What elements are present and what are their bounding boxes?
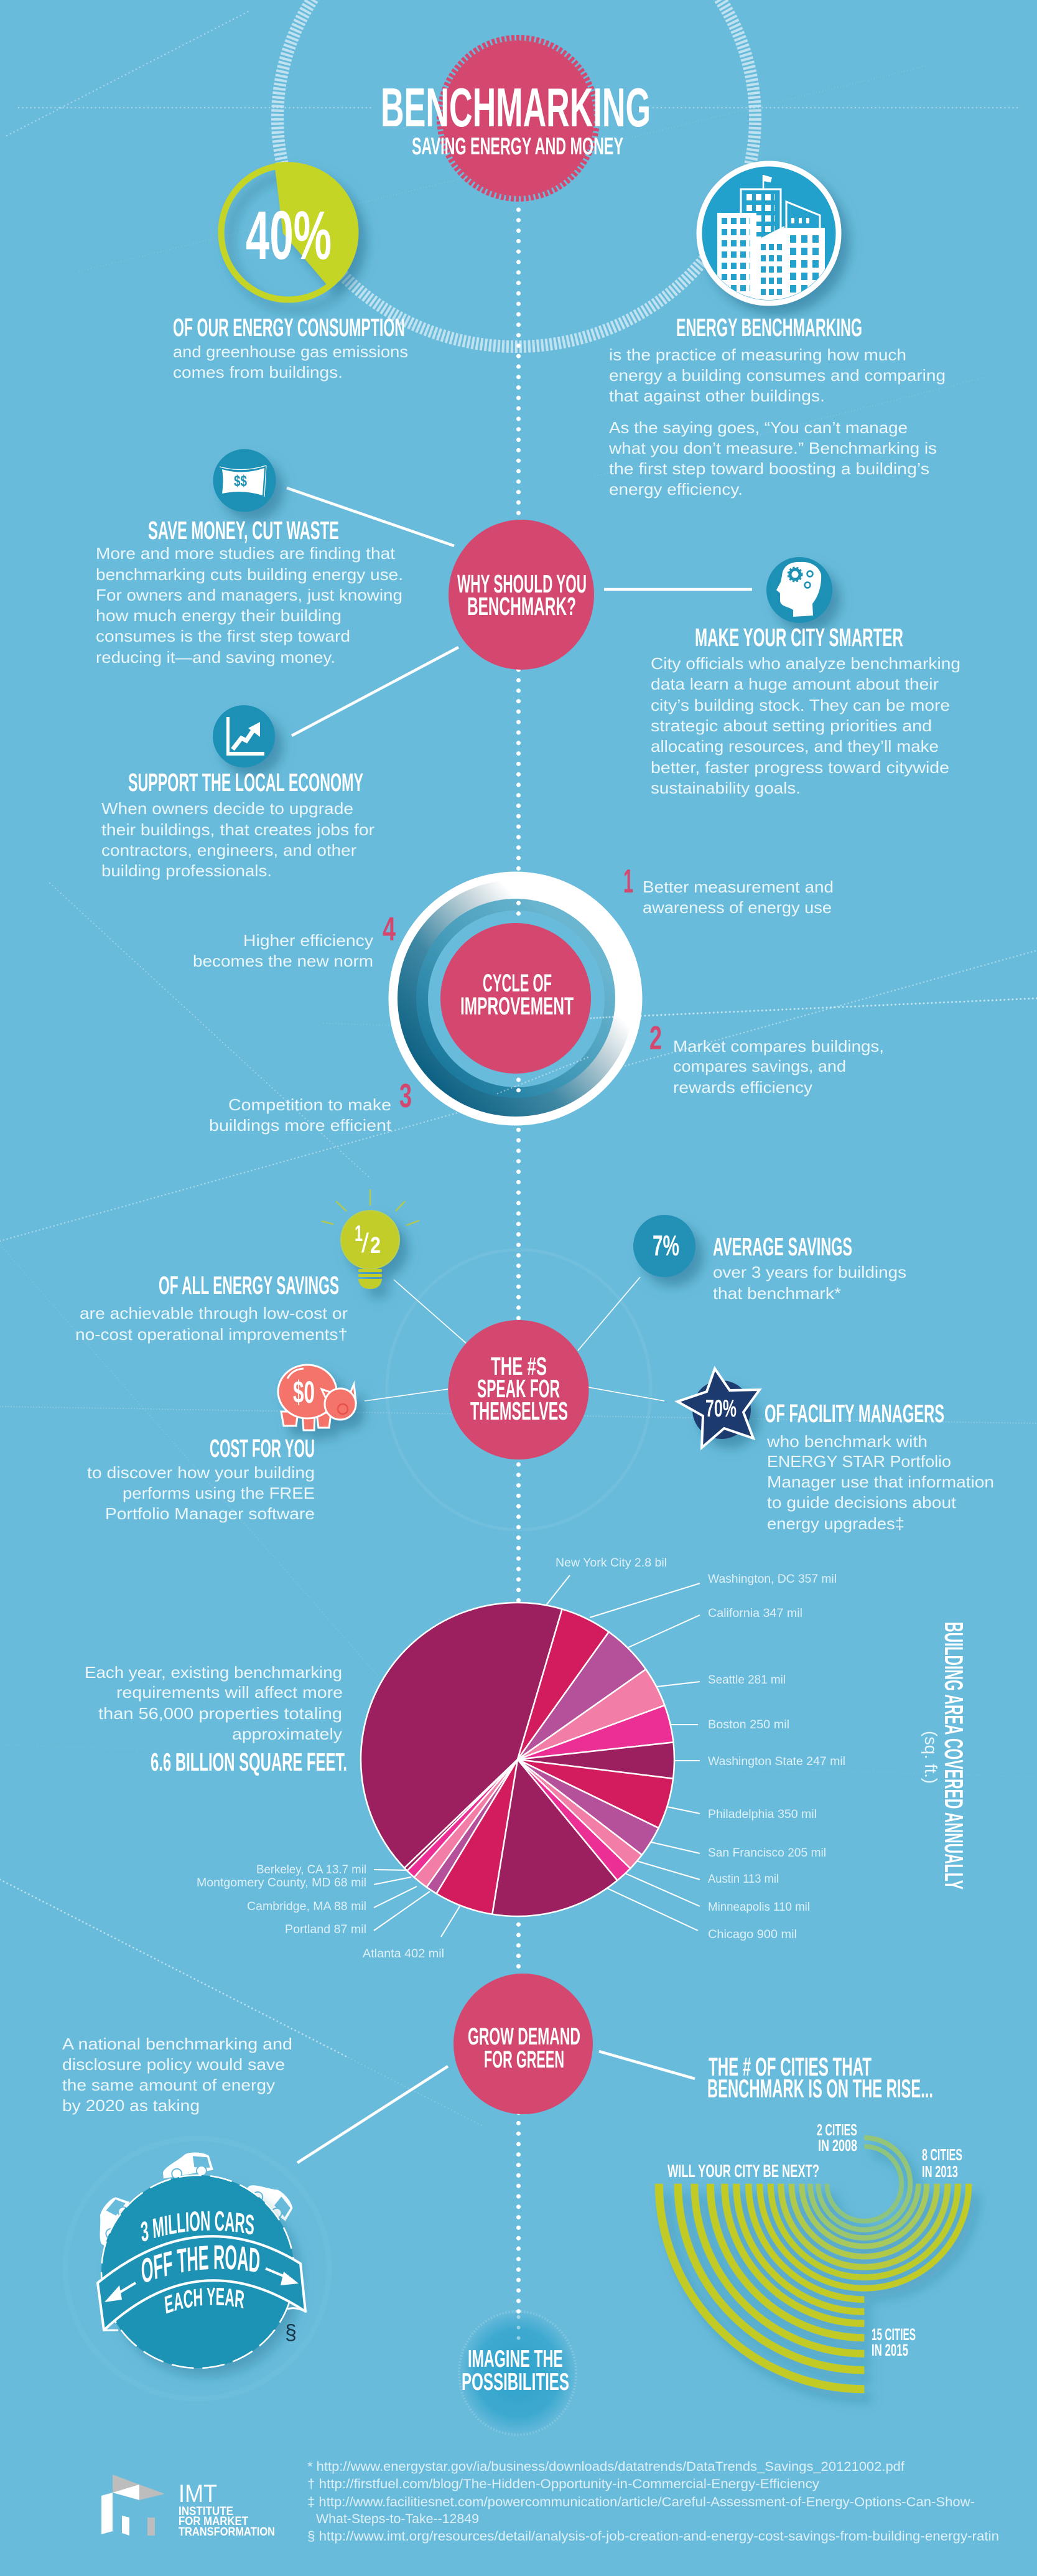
average savings body: over 3 years for buildings	[713, 1263, 906, 1281]
facility managers body: Manager use that information	[767, 1473, 994, 1491]
icon: 40 percent pie ring	[221, 162, 358, 300]
city body text	[651, 654, 960, 797]
city body text: sustainability goals.	[651, 779, 801, 797]
step 3: Competition to make	[228, 1095, 391, 1114]
body text: that against other buildings.	[609, 386, 825, 405]
numbers connector lines	[365, 1277, 664, 1401]
body text: As the saying goes, “You can’t manage	[609, 418, 908, 437]
step 3	[209, 1077, 412, 1135]
panel: grow demand for green	[62, 1974, 982, 2405]
facility managers body	[766, 1432, 994, 1533]
arc labels: 15 CITIES	[872, 2325, 916, 2344]
cost for you body: Portfolio Manager software	[105, 1504, 315, 1523]
badge text: 3 million cars: 3 MILLION CARS	[141, 2211, 254, 2242]
pie intro text: requirements will affect more	[116, 1683, 343, 1702]
footnotes: § http://www.imt.org/resources/detail/analysis-of-job-creation-and-energy-cost-savings-from-building-energy-ratin	[307, 2529, 999, 2544]
icon: right car	[244, 2173, 298, 2225]
support body text: When owners decide to upgrade	[101, 799, 353, 818]
energy savings body	[75, 1304, 348, 1344]
panel: energy benchmarking	[608, 164, 946, 499]
city body text: better, faster progress toward citywide	[651, 758, 949, 777]
icon: light bulb one half: 2	[370, 1232, 381, 1258]
vertical axis title: BUILDING AREA COVERED ANNUALLY	[939, 1622, 969, 1890]
ribbon arrows	[105, 2269, 299, 2302]
callout: 6.6 billion square feet: 6.6 BILLION SQUARE FEET.	[151, 1748, 347, 1776]
city body text: City officials who analyze benchmarking	[651, 654, 960, 673]
pie labels: Montgomery County, MD 68 mil	[197, 1876, 366, 1890]
icon: 7 percent badge	[633, 1215, 695, 1277]
panel: why should you benchmark	[96, 449, 960, 880]
pie labels: Washington State 247 mil	[708, 1755, 845, 1768]
average savings body: that benchmark*	[713, 1284, 841, 1303]
why heading line 2: BENCHMARK?	[467, 592, 576, 621]
city body text: city’s building stock. They can be more	[651, 696, 950, 714]
numbers circle	[448, 1320, 588, 1459]
badge text: off the road: OFF THE ROAD	[142, 2246, 260, 2282]
imagine the possibilities circle	[458, 2310, 577, 2436]
arc labels	[667, 2120, 962, 2359]
hatched large ring	[277, 0, 755, 347]
heading: energy benchmarking: ENERGY BENCHMARKING	[676, 313, 862, 342]
support body text: contractors, engineers, and other	[101, 841, 356, 859]
pie labels: Washington, DC 357 mil	[708, 1573, 837, 1586]
save money body text: how much energy their building	[96, 606, 342, 625]
step 1: awareness of energy use	[643, 898, 832, 917]
why heading line 1: WHY SHOULD YOU	[457, 569, 587, 598]
grow heading line 1: GROW DEMAND	[468, 2023, 580, 2050]
pie intro text: approximately	[232, 1725, 342, 1743]
average savings body	[713, 1263, 906, 1303]
pie labels: Seattle 281 mil	[708, 1674, 786, 1687]
pie labels: Atlanta 402 mil	[363, 1947, 444, 1960]
logo wordmark: IMT	[179, 2480, 217, 2508]
badge: 3 million cars off the road	[96, 2152, 307, 2381]
arc labels: IN 2013	[922, 2162, 958, 2181]
icon: light bulb one half: 1	[355, 1220, 363, 1246]
step 1: Better measurement and	[643, 878, 834, 896]
step 2: Market compares buildings,	[673, 1037, 884, 1056]
pie labels	[197, 1557, 845, 1960]
facility managers body: energy upgrades‡	[767, 1514, 904, 1533]
heading: number of cities on the rise	[707, 2052, 933, 2103]
numbers heading line 1: THE #S	[491, 1352, 547, 1380]
arc labels: 2 CITIES	[817, 2120, 857, 2139]
icon: growth chart	[213, 705, 275, 767]
icon: piggy bank: $0	[293, 1375, 315, 1410]
pie chart	[361, 1603, 674, 1916]
save money body text: benchmarking cuts building energy use.	[96, 565, 403, 584]
pie intro text: than 56,000 properties totaling	[98, 1704, 342, 1723]
national policy text: disclosure policy would save	[62, 2055, 285, 2074]
title circle	[439, 37, 597, 199]
pie intro text: Each year, existing benchmarking	[85, 1663, 342, 1682]
support body text	[101, 799, 374, 880]
step 1	[623, 863, 834, 917]
icon: top car	[162, 2151, 214, 2180]
icon: buildings	[699, 164, 839, 306]
body text: energy a building consumes and comparing	[609, 366, 946, 385]
national policy text	[62, 2035, 292, 2115]
icon: light bulb one half	[322, 1189, 419, 1289]
step 4: becomes the new norm	[193, 952, 373, 970]
step 3: buildings more efficient	[209, 1116, 392, 1135]
icon: light bulb one half: /	[361, 1228, 370, 1258]
grow heading line 2: FOR GREEN	[484, 2046, 564, 2073]
save money body text: For owners and managers, just knowing	[96, 586, 402, 604]
heading: save money: SAVE MONEY, CUT WASTE	[148, 516, 339, 545]
arc labels: IN 2008	[818, 2136, 857, 2155]
badge text: 3 million cars	[141, 2211, 254, 2242]
cycle center circle	[440, 923, 591, 1074]
logo wordmark	[179, 2480, 275, 2539]
panel: cycle of improvement	[193, 863, 884, 1135]
why circle	[449, 520, 594, 670]
body text: is the practice of measuring how much	[609, 345, 906, 364]
save money body text: consumes is the first step toward	[96, 627, 350, 645]
section footnote mark: §	[285, 2321, 297, 2344]
ribbon flaps	[104, 2308, 305, 2330]
save money body text	[96, 544, 403, 667]
numbers heading line 3: THEMSELVES	[470, 1397, 568, 1425]
step 1: 1	[623, 863, 633, 900]
imagine heading line 2: POSSIBILITIES	[462, 2369, 569, 2396]
badge disc	[101, 2175, 294, 2368]
title: BENCHMARKING	[381, 77, 651, 138]
body text: energy efficiency.	[609, 480, 743, 499]
support body text: building professionals.	[101, 861, 272, 880]
chart: concentric city arcs	[659, 2138, 969, 2389]
arc labels: WILL YOUR CITY BE NEXT?	[667, 2161, 819, 2181]
step 2: 2	[649, 1019, 662, 1057]
badge dashed edge	[101, 2175, 294, 2368]
panel: 40 percent stat	[173, 162, 408, 382]
city body text: data learn a huge amount about their	[651, 675, 939, 693]
logo mark	[101, 2475, 165, 2536]
cost for you body: to discover how your building	[87, 1463, 315, 1482]
pie labels: Austin 113 mil	[708, 1873, 779, 1886]
pie labels: Cambridge, MA 88 mil	[247, 1900, 366, 1913]
heading: support the local economy: SUPPORT THE LOCAL ECONOMY	[128, 768, 363, 797]
grow circle	[453, 1974, 593, 2114]
pie labels: Philadelphia 350 mil	[708, 1808, 817, 1821]
vertical unit label: (sq. ft.)	[921, 1731, 941, 1784]
footnotes: * http://www.energystar.gov/ia/business/downloads/datatrends/DataTrends_Savings_20121002.pdf	[307, 2460, 904, 2474]
footnotes	[307, 2460, 999, 2544]
pie labels: Berkeley, CA 13.7 mil	[256, 1863, 366, 1876]
heading: of all energy savings: OF ALL ENERGY SAVINGS	[159, 1271, 339, 1300]
footnotes: ‡ http://www.facilitiesnet.com/powercommunication/article/Careful-Assessment-of-Energy-Options-Can-Show-	[307, 2495, 975, 2509]
pie intro text	[85, 1663, 343, 1743]
icon: left car	[87, 2192, 134, 2248]
footnotes: What-Steps-to-Take--12849	[316, 2512, 479, 2526]
save money body text: More and more studies are finding that	[96, 544, 396, 563]
support body text: their buildings, that creates jobs for	[101, 820, 374, 839]
heading: number of cities on the rise: THE # OF CITIES THAT	[709, 2052, 872, 2081]
heading: average savings: AVERAGE SAVINGS	[713, 1232, 852, 1261]
body text	[608, 345, 946, 499]
numbers heading line 2: SPEAK FOR	[477, 1374, 560, 1403]
badge text: each year: EACH YEAR	[164, 2288, 244, 2314]
why connector lines	[287, 488, 752, 736]
body text	[173, 342, 408, 382]
pie labels: Minneapolis 110 mil	[708, 1901, 810, 1914]
pie labels: New York City 2.8 bil	[556, 1557, 667, 1570]
cycle heading line 1: CYCLE OF	[483, 970, 552, 997]
pie labels: Portland 87 mil	[285, 1923, 366, 1936]
heading: cost for you: COST FOR YOU	[210, 1434, 315, 1463]
cycle heading line 2: IMPROVEMENT	[460, 993, 574, 1020]
footnotes: † http://firstfuel.com/blog/The-Hidden-Opportunity-in-Commercial-Energy-Efficiency	[307, 2477, 820, 2491]
icon: money	[213, 449, 276, 512]
cost for you body	[87, 1463, 315, 1523]
energy savings body: no-cost operational improvements†	[75, 1325, 348, 1344]
body text: and greenhouse gas emissions	[173, 342, 408, 361]
body text: the first step toward boosting a building’s	[609, 459, 929, 478]
pie label leader lines	[374, 1575, 700, 1937]
national policy text: by 2020 as taking	[62, 2096, 200, 2115]
step 3: 3	[399, 1077, 412, 1115]
badge text: each year	[164, 2288, 244, 2314]
arc labels: IN 2015	[872, 2341, 908, 2359]
city body text: strategic about setting priorities and	[651, 716, 932, 735]
icon: 70 percent star: 70%	[705, 1395, 737, 1422]
pie labels: Chicago 900 mil	[708, 1928, 797, 1941]
step 2: rewards efficiency	[673, 1078, 812, 1097]
badge ribbon	[98, 2236, 305, 2330]
national policy text: the same amount of energy	[62, 2076, 275, 2094]
facility managers body: ENERGY STAR Portfolio	[767, 1452, 951, 1471]
arc labels: 8 CITIES	[922, 2145, 962, 2164]
logo wordmark: TRANSFORMATION	[179, 2526, 275, 2539]
facility managers body: to guide decisions about	[767, 1493, 957, 1512]
national policy text: A national benchmarking and	[62, 2035, 292, 2053]
logo wordmark: FOR MARKET	[179, 2515, 248, 2528]
icon: piggy bank	[278, 1365, 356, 1430]
pie labels: Boston 250 mil	[708, 1718, 789, 1731]
badge text: off the road	[142, 2246, 260, 2282]
body text: comes from buildings.	[173, 363, 343, 382]
body text: what you don’t measure.” Benchmarking is	[608, 439, 937, 457]
icon: head with gears	[766, 557, 832, 623]
pie labels: San Francisco 205 mil	[708, 1847, 826, 1860]
cycle rings	[388, 871, 642, 1125]
city body text: allocating resources, and they’ll make	[651, 737, 939, 756]
grow connector lines	[297, 2051, 695, 2163]
40 percent number: 40%	[246, 197, 332, 274]
step 2: compares savings, and	[673, 1057, 846, 1075]
center dotted spine	[516, 210, 521, 2345]
facility managers body: who benchmark with	[766, 1432, 928, 1451]
panel: building area pie	[85, 1557, 969, 1960]
cost for you body: performs using the FREE	[123, 1484, 315, 1502]
subtitle: SAVING ENERGY AND MONEY	[412, 133, 623, 160]
heading: of our energy consumption: OF OUR ENERGY CONSUMPTION	[173, 313, 405, 342]
logo wordmark: INSTITUTE	[179, 2505, 233, 2518]
panel: the numbers speak for themselves	[75, 1189, 994, 1533]
icon: 7 percent badge: 7%	[653, 1229, 679, 1262]
icon: 70 percent star	[677, 1369, 760, 1448]
step 4	[193, 911, 396, 970]
step 2	[649, 1019, 884, 1097]
imagine heading line 1: IMAGINE THE	[468, 2346, 563, 2372]
save money body text: reducing it—and saving money.	[96, 648, 335, 667]
energy savings body: are achievable through low-cost or	[80, 1304, 348, 1323]
step 4: Higher efficiency	[243, 931, 373, 950]
step 4: 4	[383, 911, 396, 948]
icon: money: $$	[234, 472, 247, 490]
pie labels: California 347 mil	[708, 1607, 802, 1620]
logo: IMT	[101, 2475, 275, 2539]
